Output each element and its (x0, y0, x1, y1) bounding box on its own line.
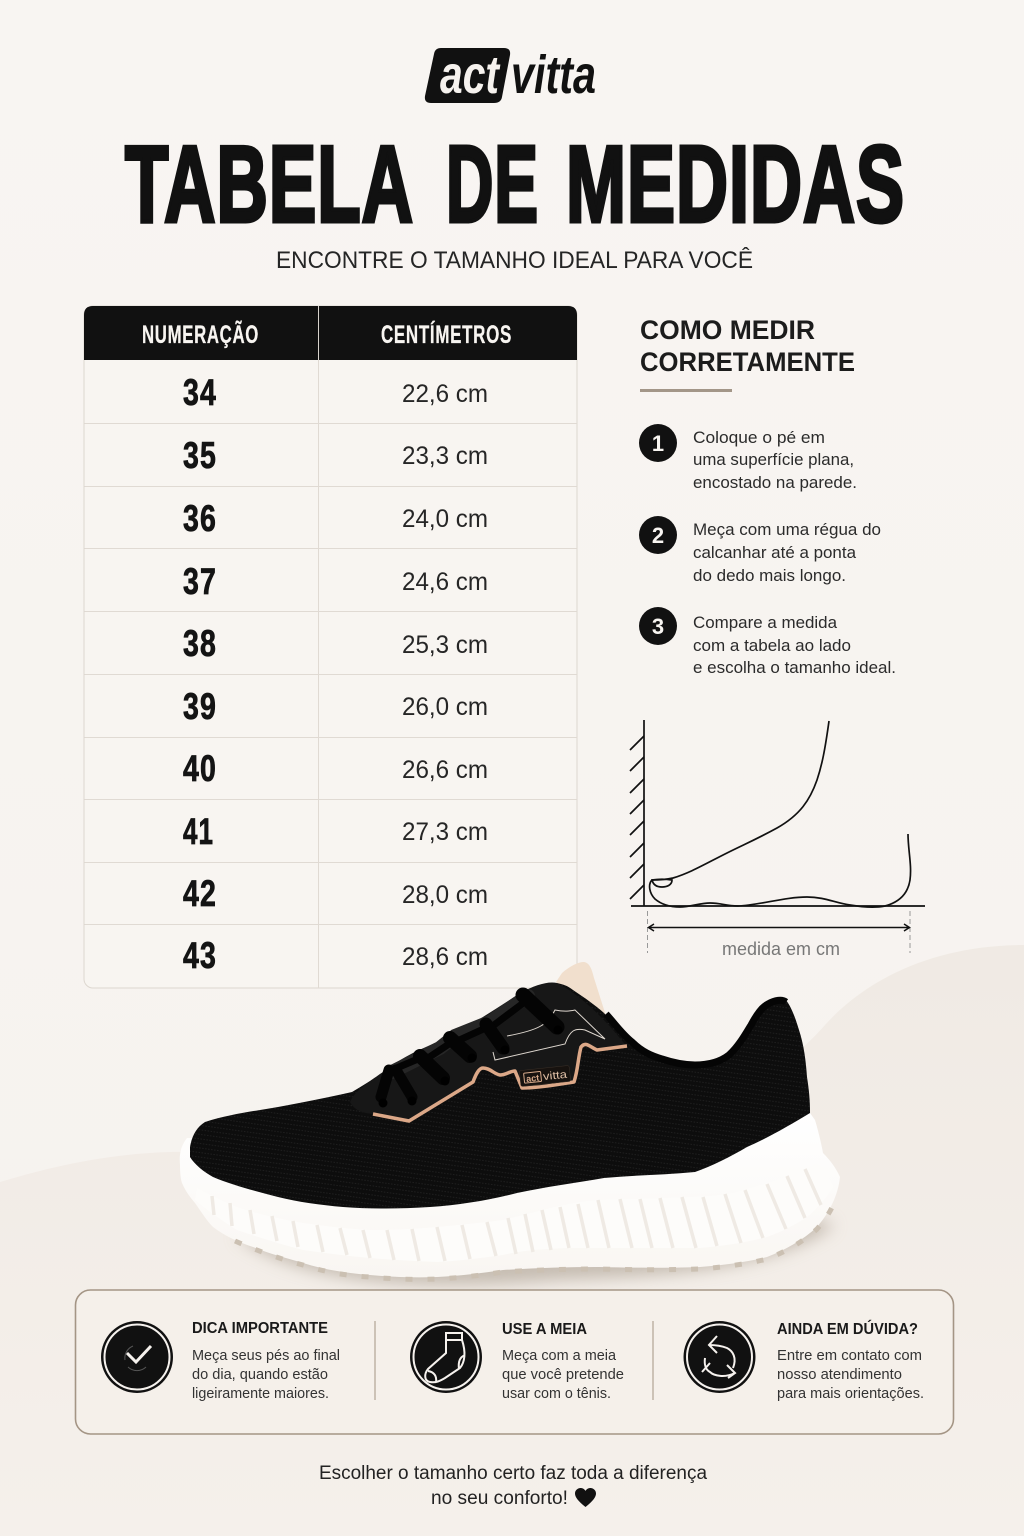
tip: dica importante: do dia, quando estão (192, 1366, 328, 1383)
lug notches (235, 1195, 837, 1279)
tip: dica importante: DICA IMPORTANTE (192, 1320, 328, 1337)
tongue pull tab (556, 962, 606, 1016)
tip: ainda em duvida: AINDA EM DÚVIDA? (777, 1319, 918, 1338)
table header: NUMERAÇÃO (142, 319, 259, 349)
tip: use a meia (410, 1321, 624, 1402)
row 43: 43 (183, 935, 217, 976)
icon: heart (575, 1488, 596, 1507)
tip: ainda em duvida: nosso atendimento (777, 1366, 902, 1383)
row 40: 26,6 cm (402, 756, 488, 784)
tip: ainda em duvida: Entre em contato com (777, 1347, 922, 1364)
row 41: 27,3 cm (402, 818, 488, 846)
step 3: e escolha o tamanho ideal. (693, 658, 896, 677)
step 3: 3 (652, 614, 664, 639)
row 34: 34 (183, 372, 217, 413)
row 36: 24,0 cm (402, 505, 488, 533)
step 2: Meça com uma régua do (693, 520, 881, 539)
row 35 (183, 435, 488, 476)
tip: ainda em duvida: para mais orientações. (777, 1385, 924, 1402)
step 1: uma superfície plana, (693, 450, 854, 469)
row 40 (183, 748, 488, 789)
lace panel (350, 982, 627, 1122)
logo: actvitta (425, 45, 596, 105)
diagram: foot measurement (630, 720, 925, 959)
tip: use a meia: usar com o tênis. (502, 1385, 611, 1402)
tip: use a meia: Meça com a meia (502, 1347, 617, 1364)
title: DE (446, 124, 539, 246)
row 41 (183, 811, 488, 852)
step 3: Compare a medida (693, 613, 838, 632)
icon: check (101, 1321, 173, 1393)
sole (180, 1113, 840, 1279)
row 37: 24,6 cm (402, 568, 488, 596)
panel: tips (76, 1290, 954, 1434)
step 2: do dedo mais longo. (693, 566, 846, 585)
row 34: 22,6 cm (402, 380, 488, 408)
step 1: encostado na parede. (693, 473, 857, 492)
row 39: 39 (183, 686, 217, 727)
collar lining (606, 1000, 786, 1065)
tip: dica importante: Meça seus pés ao final (192, 1347, 340, 1364)
table header (84, 306, 577, 360)
knit upper (190, 983, 810, 1208)
diagram: foot measurement: medida em cm (722, 939, 840, 959)
heading: como medir (640, 315, 855, 392)
step 1: Coloque o pé em (693, 428, 825, 447)
shoe (180, 962, 840, 1285)
step 3 (639, 607, 896, 677)
step 2 (639, 516, 881, 585)
laces (381, 995, 558, 1103)
panel: size table (84, 306, 577, 988)
tip: use a meia: USE A MEIA (502, 1321, 587, 1338)
row 42 (183, 873, 488, 914)
sole ribs (212, 1169, 821, 1261)
title: TABELA (125, 124, 414, 246)
heading: como medir: COMO MEDIR (640, 315, 815, 345)
row 39: 26,0 cm (402, 693, 488, 721)
step 2: calcanhar até a ponta (693, 543, 857, 562)
rose gold stripe (373, 1044, 627, 1121)
row 38: 25,3 cm (402, 631, 488, 659)
step 3: com a tabela ao lado (693, 636, 851, 655)
tip: dica importante (101, 1320, 340, 1402)
logo: actvitta: vitta (511, 45, 596, 105)
row 43 (183, 935, 488, 976)
row 35: 35 (183, 435, 217, 476)
footer message: no seu conforto! (431, 1488, 568, 1509)
tip: ainda em duvida (684, 1319, 924, 1402)
shoe shadow (235, 1215, 835, 1285)
shoe badge (519, 1065, 571, 1087)
row 43: 28,6 cm (402, 943, 488, 971)
footer message: Escolher o tamanho certo faz toda a diferença (319, 1463, 707, 1484)
tip: dica importante: ligeiramente maiores. (192, 1385, 329, 1402)
icon: sock (410, 1321, 482, 1393)
row 38: 38 (183, 623, 217, 664)
footer message (319, 1463, 707, 1509)
row 42: 28,0 cm (402, 881, 488, 909)
row 38 (183, 623, 488, 664)
title (125, 124, 905, 246)
row 40: 40 (183, 748, 217, 789)
step 1 (639, 424, 857, 492)
row 36 (183, 498, 488, 539)
rib zone (195, 1163, 833, 1262)
tip: use a meia: que você pretende (502, 1366, 624, 1383)
cream trim line (493, 1010, 605, 1060)
row 37 (183, 561, 488, 602)
row 37: 37 (183, 561, 217, 602)
row 41: 41 (183, 811, 214, 852)
step 2: 2 (652, 523, 664, 548)
icon: refresh arrows (684, 1321, 756, 1393)
logo: actvitta: act (440, 45, 501, 105)
row 36: 36 (183, 498, 217, 539)
row 34 (183, 372, 488, 413)
heading: como medir: CORRETAMENTE (640, 347, 855, 377)
row 39 (183, 686, 488, 727)
row 42: 42 (183, 873, 217, 914)
step 1: 1 (652, 431, 664, 456)
row 35: 23,3 cm (402, 442, 488, 470)
subtitle: ENCONTRE O TAMANHO IDEAL PARA VOCÊ (276, 247, 753, 274)
table header: CENTÍMETROS (381, 320, 512, 349)
shoe badge: act (526, 1073, 540, 1084)
shoe badge: vitta (542, 1069, 569, 1083)
